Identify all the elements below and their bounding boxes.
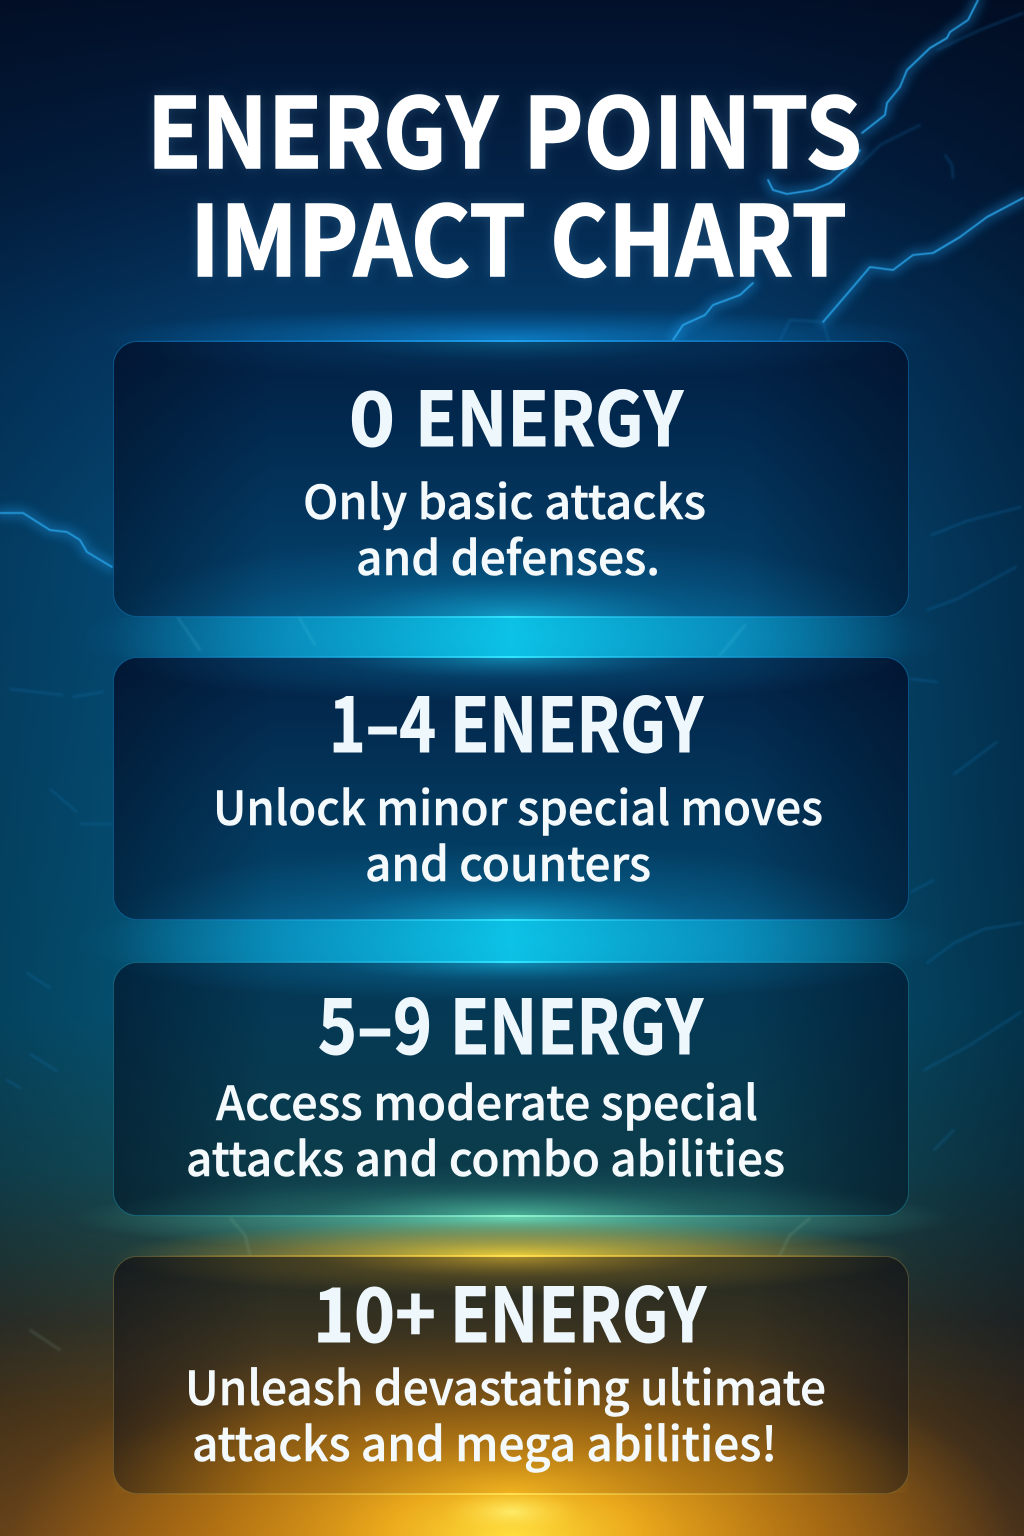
heading: 1-4 energy: 1–4 [329,665,436,774]
description: 0 energy [303,464,706,589]
description: 0 energy: Only basic attacks [303,464,706,533]
description: 5-9 energy: attacks and combo abilities [186,1121,785,1190]
heading: 10+ energy: ENERGY [450,1255,707,1364]
panel: 0 energy [114,340,908,618]
description: 1-4 energy [213,770,823,895]
description: 10+ energy: attacks and mega abilities! [192,1406,777,1475]
heading: 5-9 energy [318,967,704,1076]
heading: 1-4 energy [329,665,704,774]
title: IMPACT [190,163,526,304]
description: 10+ energy [185,1350,826,1475]
description: 5-9 energy [186,1065,785,1190]
heading: 0 energy: ENERGY [415,359,684,468]
description: 5-9 energy: Access moderate special [216,1065,758,1134]
panel: 5-9 energy [114,961,908,1217]
title [147,55,862,304]
title: CHART [550,163,847,304]
heading: 1-4 energy: ENERGY [450,665,704,774]
heading: 10+ energy: 10+ [313,1255,436,1364]
heading: 10+ energy [313,1255,707,1364]
description: 1-4 energy: and counters [365,826,651,895]
title: ENERGY [147,55,499,196]
description: 0 energy: and defenses. [356,520,660,589]
description: 10+ energy: Unleash devastating ultimate [185,1350,826,1419]
connector glows [72,308,952,1292]
heading: 0 energy: 0 [349,359,395,468]
panel: 1-4 energy [114,656,908,921]
heading: 5-9 energy: 5–9 [318,967,432,1076]
title: POINTS [523,55,862,196]
heading: 5-9 energy: ENERGY [450,967,704,1076]
description: 1-4 energy: Unlock minor special moves [213,770,823,839]
panel: 10+ energy [114,1255,908,1495]
